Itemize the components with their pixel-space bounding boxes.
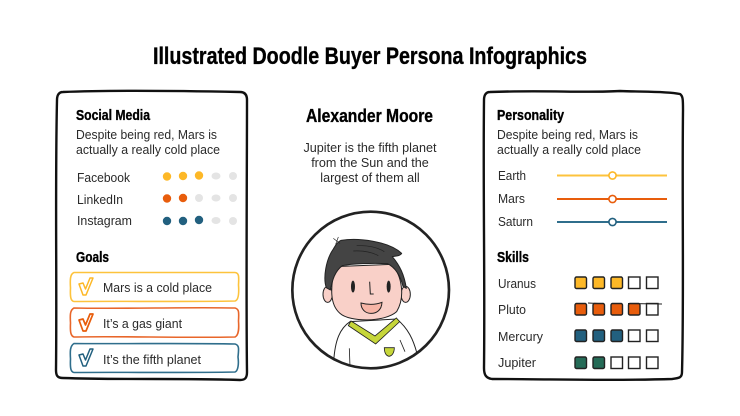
panel outline — [484, 91, 683, 380]
goal: gas giant: It’s a gas giant — [103, 317, 183, 331]
avatar ring — [292, 212, 449, 368]
slider: earth: Earth — [498, 169, 526, 183]
row: linkedin: LinkedIn — [77, 193, 123, 207]
goal: mars — [70, 272, 239, 302]
skill: mercury: Mercury — [498, 330, 544, 344]
text: persona description: largest of them all — [320, 171, 420, 185]
slider: mars: Mars — [498, 192, 525, 206]
text: social media description: actually a really cold place — [76, 143, 220, 157]
text: personality description: actually a really cold place — [497, 143, 641, 157]
heading: persona name: Alexander Moore — [306, 106, 433, 126]
text: persona description — [303, 141, 437, 185]
text: social media description — [76, 128, 220, 157]
goal: fifth planet: It’s the fifth planet — [103, 353, 202, 367]
avatar illustration — [292, 212, 449, 370]
ears — [323, 286, 332, 302]
skill: jupiter — [498, 356, 658, 370]
slider: mars — [498, 192, 667, 206]
skill: pluto: Pluto — [498, 303, 526, 317]
goal: fifth planet — [70, 344, 239, 372]
skill: pluto — [498, 303, 662, 317]
text: persona description: from the Sun and the — [311, 156, 429, 170]
panel outline — [56, 91, 247, 380]
slider: saturn: Saturn — [498, 215, 533, 229]
text: persona description: Jupiter is the fifth planet — [303, 141, 437, 155]
mouth — [361, 302, 382, 313]
slider: saturn — [498, 215, 667, 229]
face — [332, 264, 402, 320]
panel: right personality and skills — [484, 91, 683, 380]
slider: earth — [498, 169, 667, 183]
row: instagram — [77, 214, 237, 228]
skill: jupiter: Jupiter — [498, 356, 536, 370]
hair — [325, 239, 406, 290]
skill: mercury — [498, 330, 658, 344]
goal: gas giant — [70, 308, 239, 337]
heading: goals: Goals — [76, 249, 109, 266]
text: social media description: Despite being red, Mars is — [76, 128, 217, 142]
skill: uranus — [498, 277, 658, 291]
heading: social media: Social Media — [76, 107, 151, 124]
heading: personality: Personality — [497, 107, 565, 124]
heading: skills: Skills — [497, 249, 529, 266]
eyes — [351, 281, 355, 293]
row: facebook — [77, 171, 237, 185]
row: facebook: Facebook — [77, 171, 131, 185]
skill: uranus: Uranus — [498, 277, 536, 291]
avatar circle — [292, 212, 449, 368]
goal: mars: Mars is a cold place — [103, 281, 212, 295]
text: personality description: Despite being red, Mars is — [497, 128, 638, 142]
text: personality description — [497, 128, 641, 157]
row: instagram: Instagram — [77, 214, 132, 228]
panel: left social media and goals — [56, 91, 247, 380]
row: linkedin — [77, 193, 237, 207]
title: Illustrated Doodle Buyer Persona Infographics — [153, 43, 587, 70]
shirt — [334, 318, 417, 370]
nose — [370, 282, 374, 294]
